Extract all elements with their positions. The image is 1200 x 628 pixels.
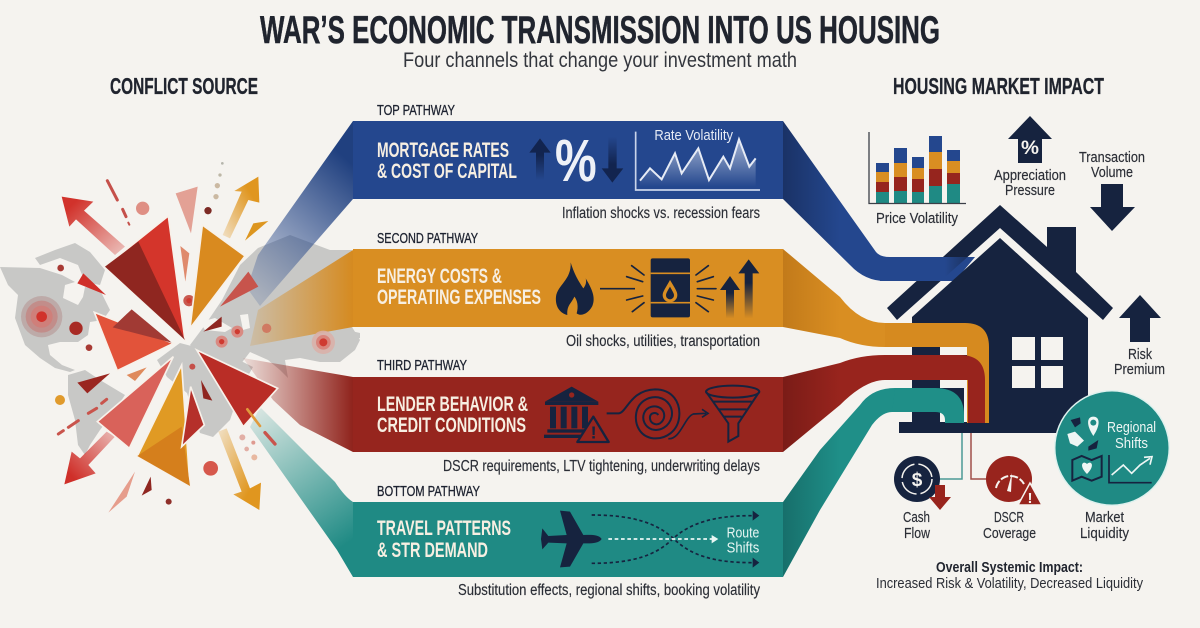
appreciation pressure arrow: Pressure — [1005, 183, 1055, 199]
cash flow icon: Cash — [903, 510, 930, 526]
dscr coverage icon: Coverage — [983, 526, 1036, 542]
icons: bank, spiral, funnel — [544, 386, 759, 443]
transaction volume arrow: Transaction — [1079, 150, 1145, 166]
orange arrow down-right — [218, 428, 261, 510]
dscr coverage icon: DSCR — [994, 510, 1024, 526]
icons: bank, spiral, funnel: ! — [591, 423, 597, 443]
target rings: conflict hotspots — [21, 295, 335, 354]
orange arrow up-right — [223, 177, 259, 238]
subtitle: Four channels that change your investment math — [403, 49, 797, 72]
house — [887, 205, 1113, 433]
pathway 4 labels — [377, 484, 760, 599]
icons: plane and route shifts — [541, 511, 759, 568]
pathway 1 labels: MORTGAGE RATES — [377, 139, 509, 162]
icons: plane and route shifts: Shifts — [727, 541, 759, 557]
red arrow down-left — [64, 432, 115, 484]
pathway 3 labels: LENDER BEHAVIOR & — [377, 393, 528, 416]
risk premium arrow: Premium — [1114, 362, 1165, 378]
pathway 3 labels: CREDIT CONDITIONS — [377, 414, 526, 437]
pathway 1 labels: TOP PATHWAY — [377, 103, 455, 119]
pathway ribbon: blue — [247, 121, 975, 306]
world map — [0, 235, 360, 455]
pathway ribbon: orange — [250, 249, 989, 423]
regional shifts circle — [1054, 390, 1170, 506]
pathway 3 labels: THIRD PATHWAY — [377, 358, 467, 374]
pathway 2 labels: ENERGY COSTS & — [377, 265, 502, 288]
heading: conflict source: CONFLICT SOURCE — [110, 73, 258, 99]
house body — [899, 238, 1088, 433]
cash flow icon — [894, 456, 951, 542]
market liquidity label: Liquidity — [1080, 526, 1130, 542]
appreciation pressure arrow: Appreciation — [994, 168, 1066, 184]
appreciation pressure arrow — [994, 116, 1066, 199]
shards — [77, 187, 278, 513]
chart: price volatility: Price Volatility — [876, 211, 959, 227]
pathway 4 labels: Substitution effects, regional shifts, booking volatility — [458, 582, 760, 599]
appreciation pressure arrow: % — [1021, 138, 1039, 159]
icons: plane and route shifts: Route — [727, 525, 759, 541]
pathway ribbon: red — [243, 355, 985, 452]
pathway 4 labels: TRAVEL PATTERNS — [377, 517, 511, 540]
icons: percent and rate volatility chart: % — [555, 127, 597, 194]
pathway 2 labels: SECOND PATHWAY — [377, 231, 478, 247]
risk premium arrow: Risk — [1128, 347, 1153, 363]
dscr coverage icon — [983, 456, 1042, 542]
heading: housing market impact: HOUSING MARKET IMPACT — [893, 73, 1104, 99]
pathway 4 labels: BOTTOM PATHWAY — [377, 484, 480, 500]
market liquidity label — [1080, 510, 1130, 542]
icons: percent and rate volatility chart — [529, 127, 760, 194]
icons: flame, oil barrel, rising arrows — [556, 258, 759, 318]
overall systemic impact: Increased Risk & Volatility, Decreased Liquidity — [876, 576, 1144, 592]
cash flow icon: Flow — [904, 526, 930, 542]
transaction volume arrow — [1079, 150, 1145, 231]
transaction volume arrow: Volume — [1091, 165, 1133, 181]
house roof — [887, 205, 1113, 320]
overall systemic impact: Overall Systemic Impact: — [936, 560, 1083, 576]
pathway 2 labels — [377, 231, 760, 350]
house window — [1012, 337, 1063, 388]
pathway 1 labels — [377, 103, 760, 222]
explosion burst — [21, 162, 335, 513]
ribbon ends over house — [880, 257, 989, 423]
regional shifts circle: Shifts — [1115, 435, 1148, 452]
debris dots — [55, 162, 257, 505]
pathway ribbon: teal — [250, 388, 964, 577]
pathway 2 labels: OPERATING EXPENSES — [377, 286, 541, 309]
overall systemic impact — [876, 560, 1144, 592]
pathway 3 labels — [377, 358, 760, 475]
pathway 1 labels: Inflation shocks vs. recession fears — [562, 205, 760, 222]
pathway 1 labels: & COST OF CAPITAL — [377, 160, 517, 183]
dscr coverage icon: ! — [1028, 490, 1032, 507]
debris dashes — [58, 181, 275, 444]
market liquidity label: Market — [1085, 510, 1124, 526]
pathway 3 labels: DSCR requirements, LTV tightening, underwriting delays — [443, 458, 760, 475]
pathway 4 labels: & STR DEMAND — [377, 539, 488, 562]
icons: percent and rate volatility chart: Rate Volatility — [654, 128, 734, 144]
red arrow up-left — [62, 197, 125, 255]
chart: price volatility — [869, 132, 966, 227]
regional shifts circle: Regional — [1107, 419, 1156, 436]
risk premium arrow — [1114, 295, 1165, 378]
pathway 2 labels: Oil shocks, utilities, transportation — [566, 333, 760, 350]
cash flow icon: $ — [912, 470, 923, 491]
connector lines — [935, 433, 990, 479]
